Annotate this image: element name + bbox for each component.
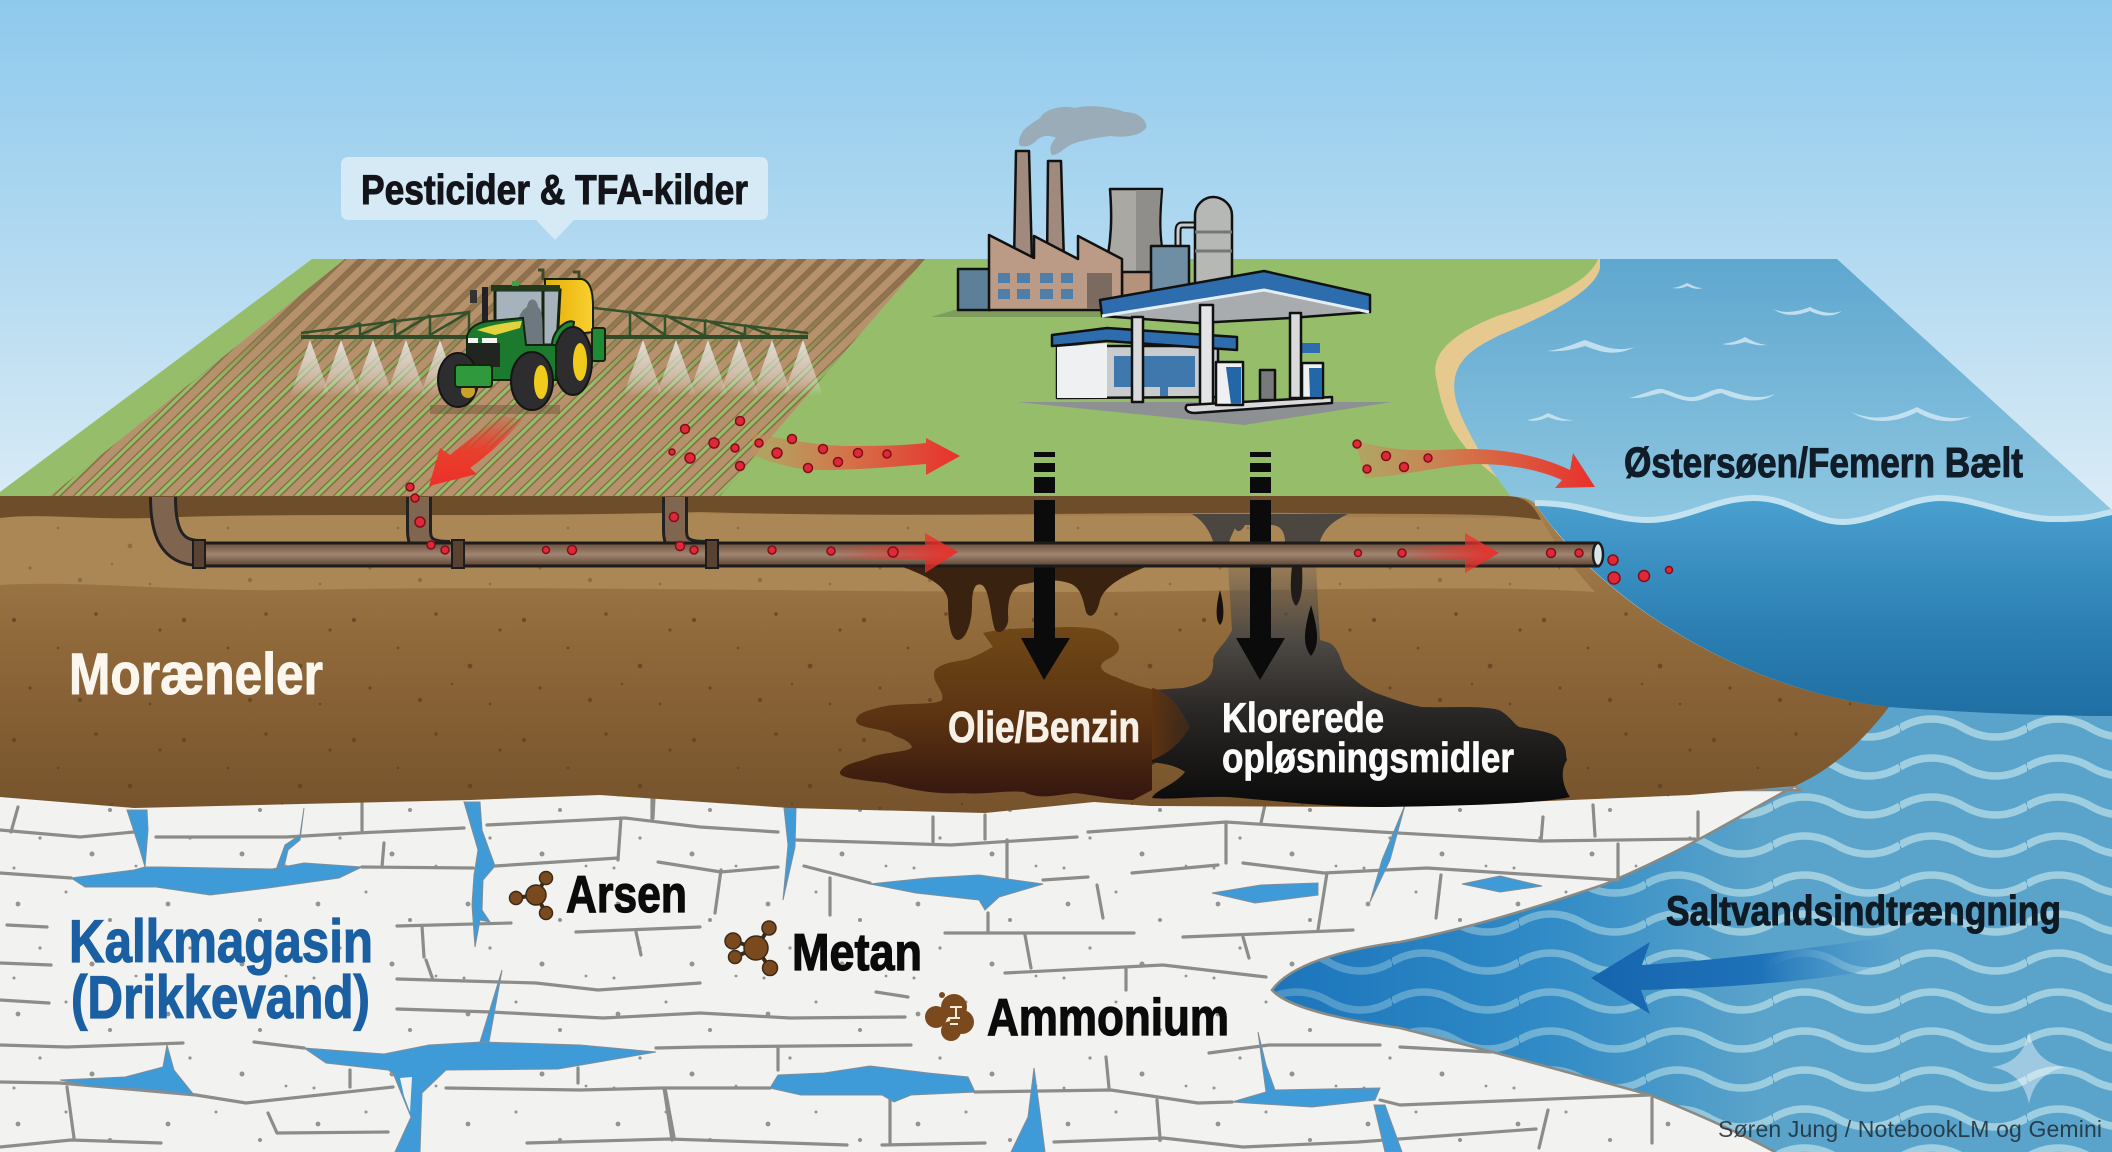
label: Klorerede opløsningsmidler: opløsningsmidler <box>1222 734 1514 781</box>
chalk fractures <box>0 797 1698 1148</box>
smoke <box>1019 106 1146 155</box>
pillars <box>1132 317 1143 402</box>
beach <box>1435 259 1640 505</box>
brown lobe overlapping the solvent plume <box>1152 688 1190 760</box>
panel: saltwater aquifer <box>1150 700 2112 1152</box>
front left wheel <box>438 353 478 407</box>
label: Klorerede opløsningsmidler: Klorerede <box>1222 694 1384 741</box>
exhaust and mirror <box>482 287 488 323</box>
yellow tank <box>538 270 579 280</box>
arrow: oil infiltration <box>1021 452 1070 680</box>
rear wheel <box>552 321 574 378</box>
label: Ammonium: Ammonium <box>987 989 1229 1047</box>
ground shadow <box>430 405 560 414</box>
panel: deep sea basin <box>1535 498 2112 716</box>
label: Metan: Metan <box>792 924 922 982</box>
cab <box>495 290 560 345</box>
front weight <box>455 365 492 387</box>
spray boom <box>301 308 808 337</box>
panel: land surface <box>0 259 1640 505</box>
label: Moræneler: Moræneler <box>69 642 323 707</box>
red arrow: pipe flow right <box>1395 533 1499 573</box>
red arrow: pipe flow left <box>830 533 958 573</box>
spray cones <box>290 340 823 396</box>
panel: sea surface <box>1454 259 2112 530</box>
shop <box>1057 346 1218 398</box>
water-filled fractures <box>60 802 1542 1152</box>
label: Arsen: Arsen <box>566 866 687 924</box>
label: Østersøen/Femern Bælt: Østersøen/Femern Bælt <box>1624 439 2023 486</box>
arrow: saltwater intrusion <box>1591 935 1900 1014</box>
crop field <box>50 259 925 496</box>
small surface ripples <box>1527 283 1972 421</box>
contaminant plume: chlorinated solvents <box>1152 514 1570 807</box>
label: Kalkmagasin (Drikkevand): Kalkmagasin <box>69 908 373 975</box>
illustration: petrol station <box>1017 271 1392 425</box>
upper light clay band <box>0 510 1595 592</box>
arrow: solvent infiltration <box>1236 452 1285 680</box>
credit: Søren Jung / NotebookLM og Gemini <box>1718 1116 2102 1142</box>
red arrow: field leaching <box>429 415 522 486</box>
label: Kalkmagasin (Drikkevand): (Drikkevand) <box>71 964 370 1031</box>
icon: sparkle watermark <box>1992 1032 2066 1104</box>
icon: Metan molecule <box>725 921 778 976</box>
label: Kalkmagasin (Drikkevand) <box>69 908 373 1031</box>
drain pipe <box>163 497 1603 568</box>
dark topsoil band <box>0 496 1541 520</box>
forecourt <box>1017 402 1392 425</box>
background: sky <box>0 0 2112 720</box>
illustration: tractor with sprayer <box>290 270 823 414</box>
red arrow: surface runoff to the east <box>752 433 960 475</box>
callout: Pesticider & TFA-kilder <box>341 157 768 240</box>
panel: chalk aquifer <box>0 786 1800 1152</box>
icon: Ammonium cluster <box>925 992 974 1041</box>
icon: Arsen molecule <box>510 872 552 920</box>
canopy <box>1102 290 1369 323</box>
wave crest <box>1535 498 2112 522</box>
callout: Pesticider & TFA-kilder: Pesticider & TFA-kilder <box>361 166 748 213</box>
contaminant particles <box>406 416 1672 584</box>
illustration: factory <box>931 106 1232 317</box>
hood <box>467 318 556 380</box>
green land <box>0 259 1605 500</box>
panel: moraine clay soil <box>0 496 1889 813</box>
label: Olie/Benzin: Olie/Benzin <box>948 703 1140 752</box>
contaminant plume: oil and petrol <box>840 566 1157 800</box>
red arrow: runoff to the Baltic <box>1355 440 1595 488</box>
label: Klorerede opløsningsmidler <box>1222 694 1514 781</box>
front right wheel <box>511 352 553 410</box>
island and pumps <box>1186 397 1332 413</box>
